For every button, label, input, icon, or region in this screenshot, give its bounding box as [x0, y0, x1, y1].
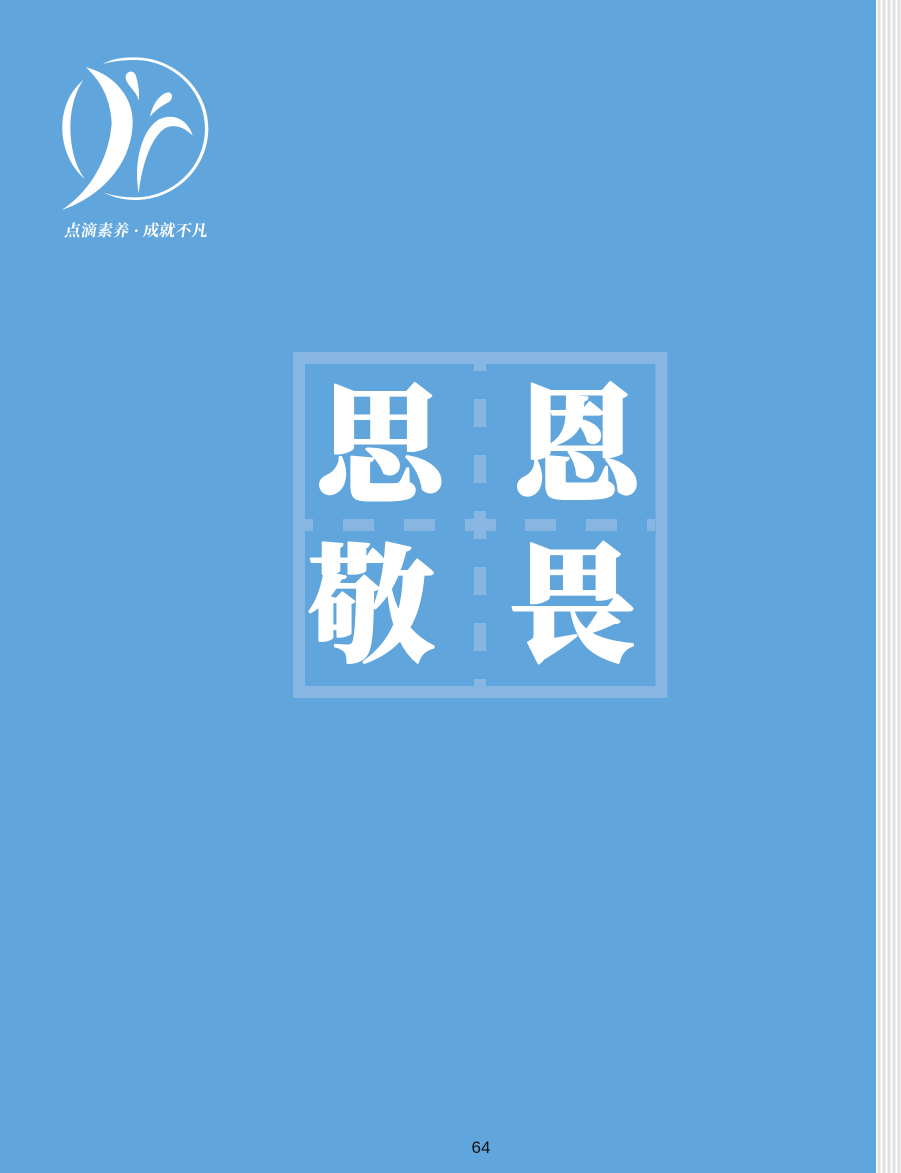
icon: logo emblem [62, 57, 208, 210]
page number: 64 [472, 1138, 490, 1157]
logo [62, 57, 209, 240]
logo tagline: 点滴素养 · 成就不凡 [63, 221, 209, 240]
title: 思恩敬畏: 思 [316, 379, 457, 519]
vertical dashed guide [474, 364, 486, 686]
horizontal dashed guide [305, 519, 655, 531]
title: 思恩敬畏: 畏 [509, 539, 636, 679]
title: 思恩敬畏: 恩 [513, 379, 652, 519]
title: 思恩敬畏 [307, 379, 652, 679]
stacked page edge stripes [878, 0, 900, 1173]
title frame with dashed cross guides [299, 358, 662, 692]
title: 思恩敬畏: 敬 [307, 539, 435, 679]
